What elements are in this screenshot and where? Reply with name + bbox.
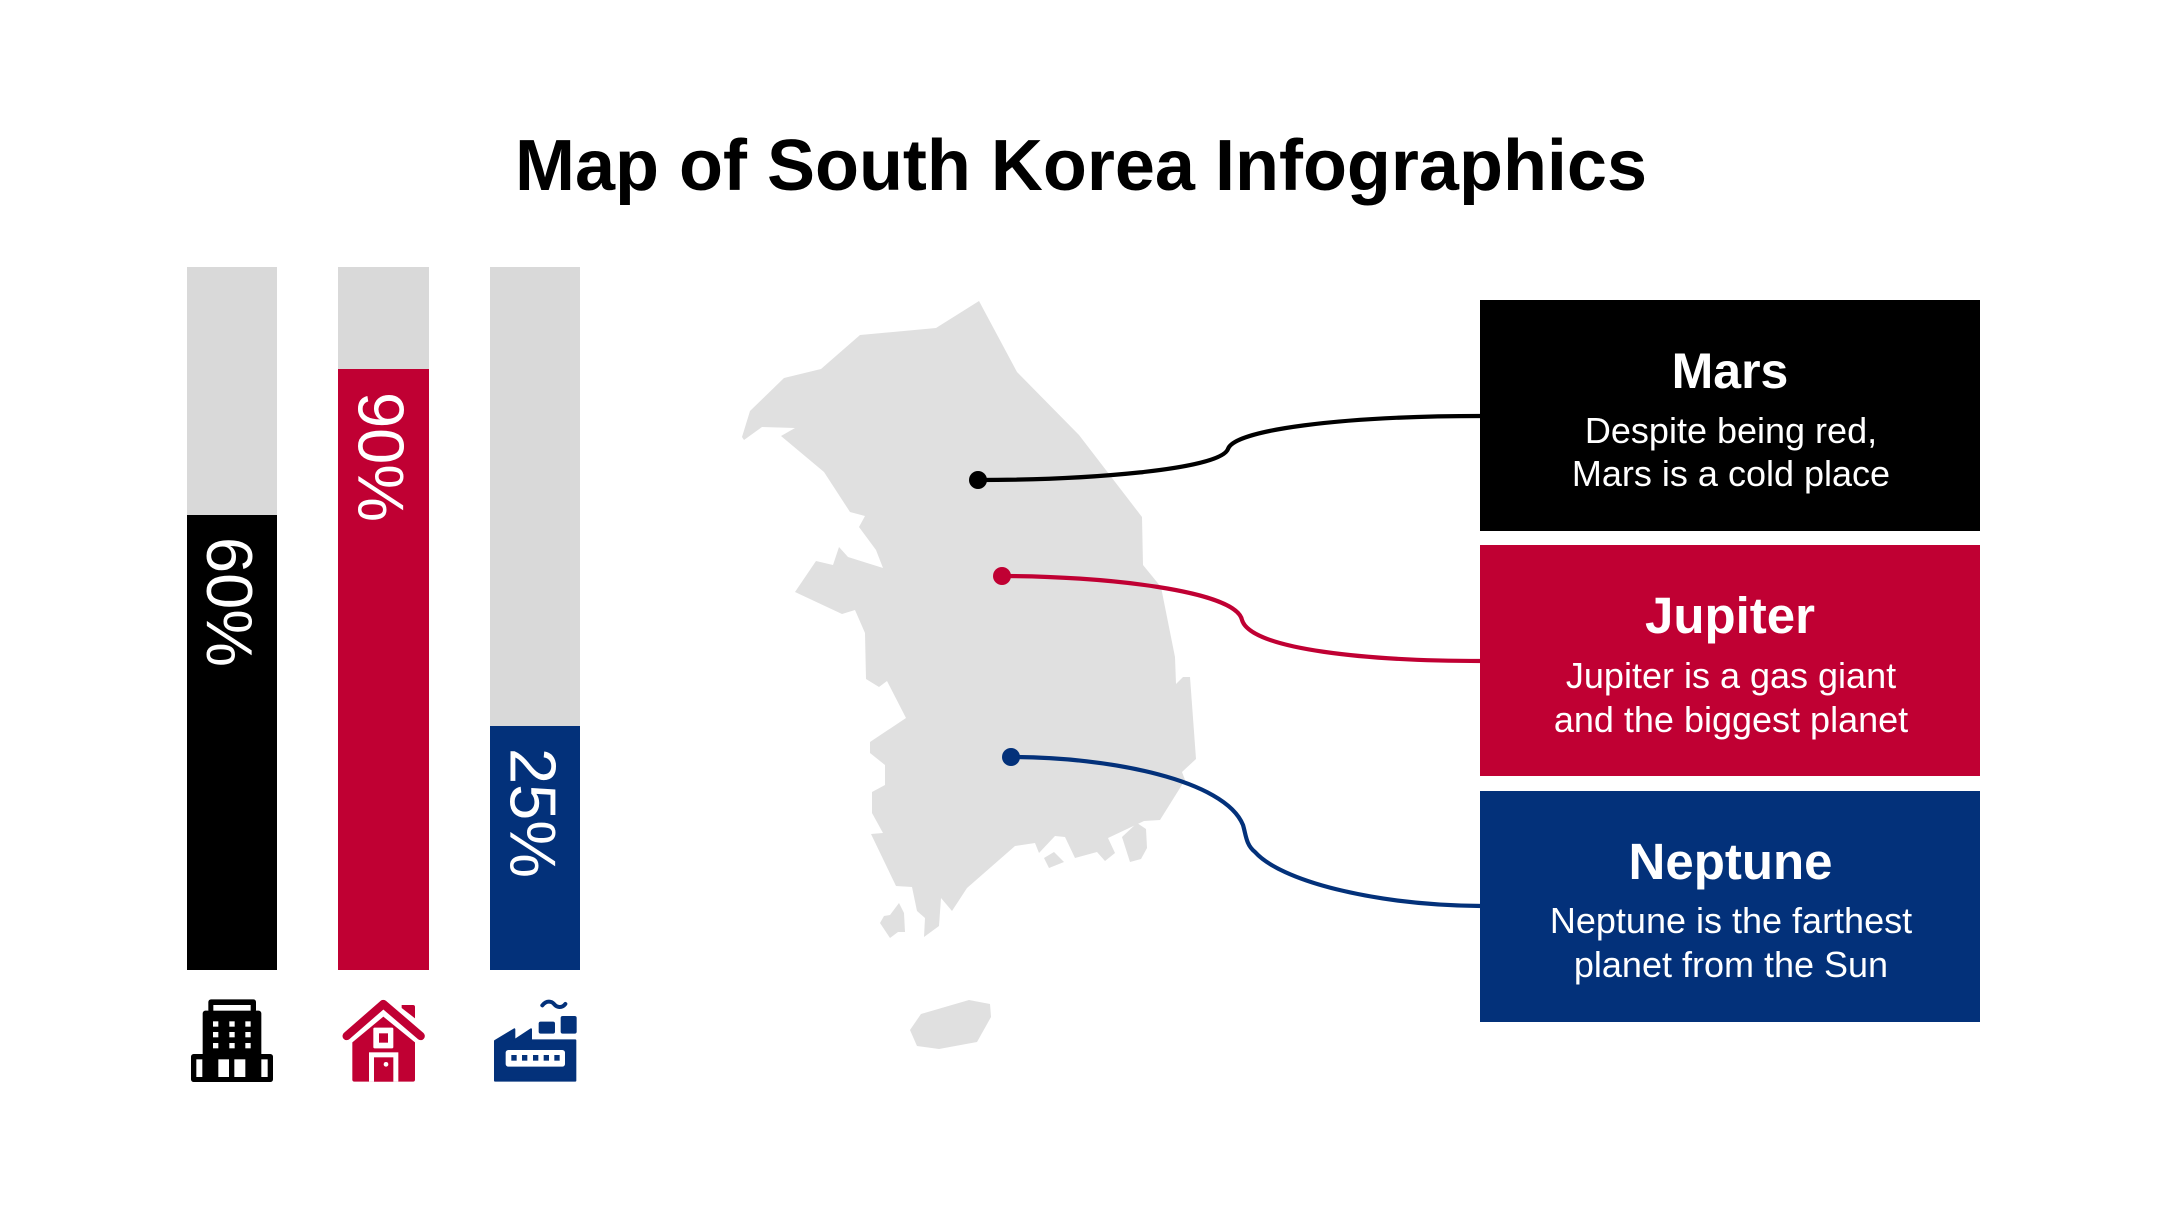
panel: Jupiter: Jupiter is a gas giant bbox=[1566, 655, 1896, 696]
panel: Mars: Despite being red, bbox=[1585, 410, 1877, 451]
title: Map of South Korea Infographics bbox=[515, 126, 1647, 206]
icon: office building bbox=[191, 999, 273, 1082]
panel: Neptune: planet from the Sun bbox=[1574, 944, 1888, 985]
panel: Jupiter: Jupiter bbox=[1645, 587, 1815, 644]
island: Jeju bbox=[910, 1000, 991, 1049]
panel: Jupiter: and the biggest planet bbox=[1554, 699, 1908, 740]
bar: 60%: 60% bbox=[193, 537, 266, 667]
panel: Mars: Mars bbox=[1672, 343, 1788, 399]
panel: Jupiter bbox=[1480, 545, 1980, 776]
island: Geoje bbox=[1122, 823, 1147, 862]
island: Namhae bbox=[1044, 852, 1064, 868]
bar chart: percentages bbox=[187, 267, 580, 970]
bar: 90% bbox=[338, 267, 429, 970]
panel: Neptune: Neptune is the farthest bbox=[1550, 900, 1912, 941]
panel: Mars: Mars is a cold place bbox=[1572, 453, 1890, 494]
panel: Neptune: Neptune bbox=[1628, 833, 1832, 890]
bar: 25%: 25% bbox=[496, 748, 570, 878]
bar: 25% bbox=[490, 267, 580, 970]
connector: Mars bbox=[969, 416, 1482, 489]
bar: 60% bbox=[187, 267, 277, 970]
bar: 90%: 90% bbox=[344, 392, 418, 522]
panel: Mars bbox=[1480, 300, 1980, 531]
icon: house bbox=[347, 1004, 421, 1082]
icon: factory bbox=[495, 1002, 577, 1081]
island: Jindo bbox=[880, 903, 905, 938]
mainland bbox=[742, 301, 1196, 937]
connector: Neptune bbox=[1002, 748, 1482, 906]
connector: Jupiter bbox=[993, 567, 1482, 661]
map of South Korea bbox=[742, 301, 1196, 1049]
panel: Neptune bbox=[1480, 791, 1980, 1022]
